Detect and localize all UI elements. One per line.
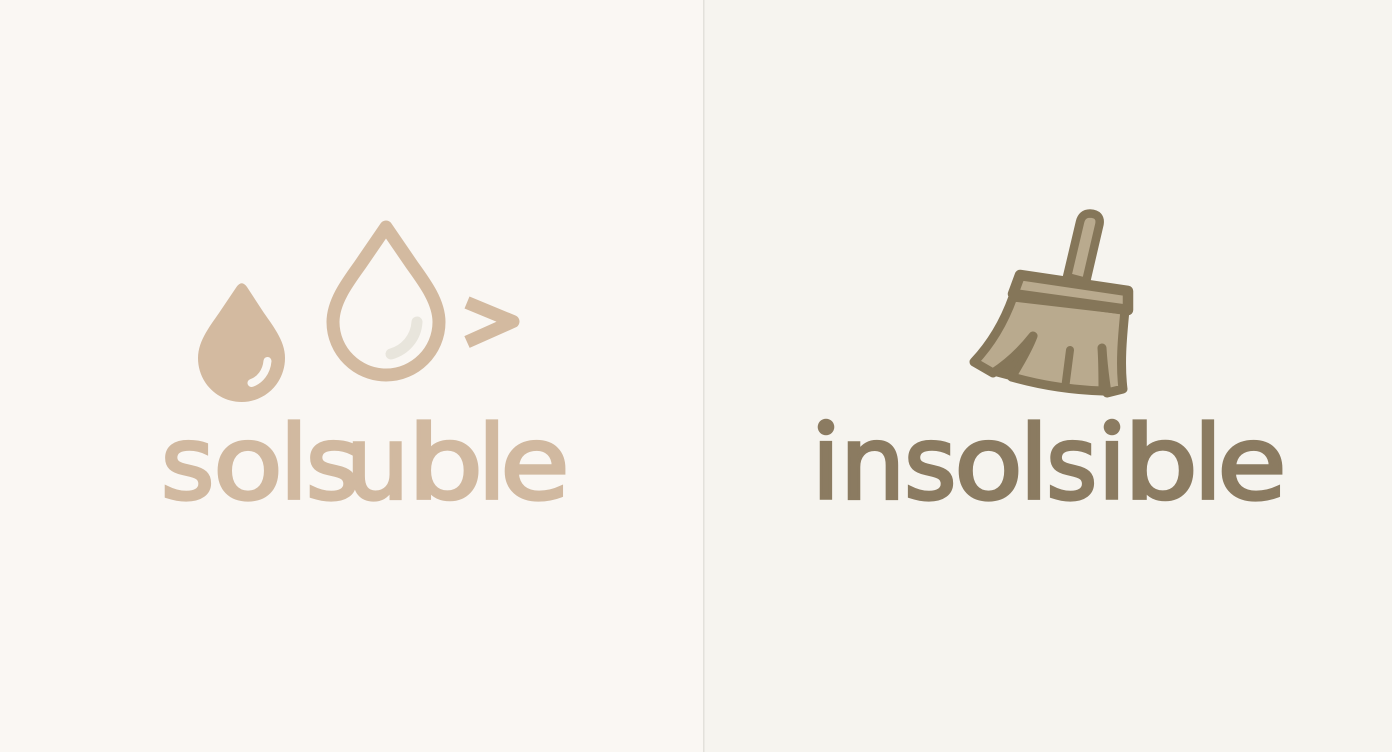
icon: outlined water drop (333, 227, 439, 375)
label: insolsible (818, 418, 1282, 502)
label: solsuble (161, 404, 570, 524)
panel: insoluble (703, 0, 1282, 752)
label: solsuble: l (280, 405, 308, 524)
label: solsuble: s (306, 405, 360, 523)
icon: broom (974, 214, 1128, 393)
label: solsuble: l (478, 405, 506, 524)
label: solsuble: b (408, 405, 483, 523)
label: solsuble: s (161, 405, 215, 523)
label: insolsible: s (904, 404, 957, 523)
label: solsuble: e (500, 405, 570, 523)
icon: greater-than chevron (467, 302, 513, 342)
label: insolsible: b (1124, 404, 1198, 523)
label: insolsible: e (1217, 405, 1287, 523)
label: insolsible: i (1098, 405, 1126, 524)
label: solsuble: u (346, 404, 409, 523)
label: insolsible: i (812, 405, 840, 524)
panel: soluble (0, 0, 703, 752)
label: insolsible: l (1020, 405, 1048, 524)
icon: filled water drop (198, 283, 285, 402)
label: insolsible: s (1046, 404, 1097, 523)
label: solsuble: o (213, 404, 283, 523)
label: insolsible: l (1194, 405, 1222, 524)
label: insolsible: n (840, 405, 905, 523)
label: insolsible: o (954, 405, 1023, 523)
